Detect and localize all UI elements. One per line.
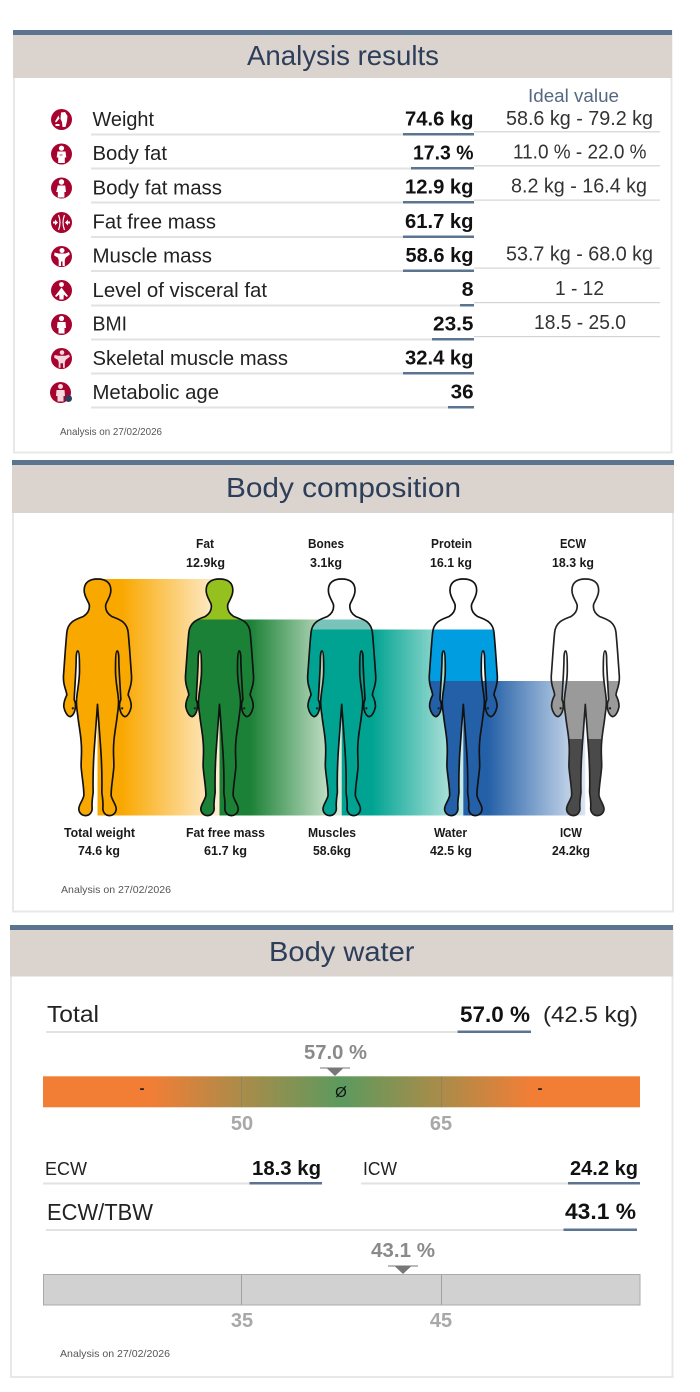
row: icw: [361, 1158, 640, 1184]
row: level of visceral fat: [51, 278, 660, 306]
row: skeletal muscle mass: Skeletal muscle mass: [92, 347, 288, 370]
label: ecw: 18.3 kg: [552, 556, 594, 570]
row: weight: 58.6 kg - 79.2 kg: [506, 108, 653, 130]
row: body fat mass: [51, 176, 660, 204]
label: water: [430, 826, 472, 858]
label: water: 42.5 kg: [430, 844, 472, 858]
figure: bones and muscles: [305, 577, 378, 829]
label: fat free mass: 61.7 kg: [204, 844, 247, 858]
gauge: total body water: Ø: [335, 1084, 347, 1101]
panel: analysis results: [13, 30, 672, 452]
icon: body fat mass: [51, 178, 72, 198]
row: ecw/tbw: ECW/TBW: [47, 1199, 153, 1225]
label: fat free mass: Fat free mass: [186, 826, 265, 840]
row: ecw/tbw: [46, 1199, 637, 1231]
label: icw: 24.2kg: [552, 844, 590, 858]
row: weight: Weight: [92, 108, 154, 131]
analysis date: Analysis on 27/02/2026: [60, 426, 162, 438]
row: metabolic age: 36: [451, 380, 474, 404]
label: total weight: Total weight: [64, 826, 136, 840]
row: total water: (42.5 kg): [543, 1002, 638, 1027]
label: protein: Protein: [431, 537, 472, 551]
gauge: total body water: -: [538, 1080, 542, 1097]
gauge: total body water: 50: [231, 1113, 253, 1135]
label: bones: 3.1kg: [310, 556, 342, 570]
gauge: ecw/tbw: [44, 1274, 640, 1332]
row: body fat mass: 8.2 kg - 16.4 kg: [511, 176, 647, 198]
row: skeletal muscle mass: [51, 346, 474, 374]
label: muscles: 58.6kg: [313, 844, 351, 858]
row: bmi: 23.5: [433, 312, 474, 336]
gauge: ecw/tbw: 35: [231, 1310, 253, 1332]
label: total weight: [64, 826, 136, 858]
row: total water: Total: [47, 1001, 99, 1027]
row: body fat mass: Body fat mass: [92, 176, 222, 200]
row: ecw/tbw: 43.1 %: [565, 1199, 636, 1224]
label: bones: Bones: [308, 537, 344, 551]
row: body fat: Body fat: [92, 142, 167, 165]
gradient band: muscles to water: [342, 630, 463, 816]
figure: protein and water: [427, 577, 500, 831]
label: fat: 12.9kg: [186, 556, 225, 570]
label: icw: ICW: [560, 826, 582, 840]
row: weight: [51, 108, 660, 136]
row: body fat: 17.3 %: [413, 142, 474, 164]
heading: body composition: Body composition: [226, 472, 461, 503]
row: level of visceral fat: Level of visceral fat: [92, 279, 267, 302]
analysis date: Analysis on 27/02/2026: [61, 884, 171, 896]
icon: visceral fat: [51, 280, 72, 301]
gradient band: total weight to fat free mass: [98, 579, 220, 816]
label: protein: [430, 537, 472, 570]
column heading: ideal value: Ideal value: [528, 85, 619, 106]
icon: metabolic age: [50, 382, 72, 403]
marker: 43.1 percent: [371, 1240, 435, 1274]
gauge: ecw/tbw: 45: [430, 1310, 452, 1332]
icon: fat free mass: [51, 212, 72, 233]
label: protein: 16.1 kg: [430, 556, 472, 570]
heading: analysis results: Analysis results: [247, 40, 439, 71]
row: muscle mass: 58.6 kg: [406, 244, 474, 267]
row: body fat: [51, 142, 660, 170]
figure: fat and fat free mass: [183, 577, 256, 819]
panel: body water: [10, 925, 673, 1377]
label: muscles: [308, 826, 356, 858]
icon: muscle mass: [51, 246, 72, 267]
row: ecw: [43, 1158, 322, 1184]
gradient band: water to icw: [463, 681, 585, 816]
marker: 43.1 percent: 43.1 %: [371, 1240, 435, 1262]
label: ecw: ECW: [560, 537, 586, 551]
heading: body water: Body water: [269, 936, 414, 967]
row: bmi: 18.5 - 25.0: [534, 312, 626, 334]
row: bmi: [51, 312, 660, 340]
row: weight: 74.6 kg: [405, 108, 474, 130]
row: metabolic age: Metabolic age: [92, 381, 219, 404]
label: ecw: [552, 537, 594, 570]
row: fat free mass: [51, 210, 474, 238]
row: muscle mass: Muscle mass: [92, 245, 212, 268]
icon: bmi: [51, 314, 72, 335]
row: total water: 57.0 %: [460, 1002, 530, 1027]
row: skeletal muscle mass: 32.4 kg: [405, 346, 474, 370]
row: bmi: BMI: [92, 313, 127, 336]
gradient band: fat free mass to muscles: [220, 620, 342, 816]
panel: body composition: [12, 460, 674, 912]
marker: 57.0 percent: [304, 1042, 367, 1076]
label: fat: [186, 537, 225, 570]
icon: skeletal muscle mass: [51, 348, 72, 369]
label: bones: [308, 537, 344, 570]
marker: 57.0 percent: 57.0 %: [304, 1042, 367, 1064]
row: total water: [46, 1001, 638, 1033]
figure: total weight: [63, 579, 132, 816]
icon: weight: [51, 109, 72, 130]
gauge: total body water: 65: [430, 1113, 452, 1135]
figure: ecw and icw: [549, 577, 622, 826]
label: fat: Fat: [196, 537, 215, 551]
label: water: Water: [434, 826, 467, 840]
row: metabolic age: [50, 380, 474, 408]
row: muscle mass: 53.7 kg - 68.0 kg: [506, 244, 653, 266]
row: fat free mass: Fat free mass: [92, 210, 216, 234]
label: icw: [552, 826, 590, 858]
label: total weight: 74.6 kg: [78, 844, 120, 858]
row: body fat: 11.0 % - 22.0 %: [513, 142, 647, 164]
row: body fat mass: 12.9 kg: [405, 176, 474, 198]
analysis date: Analysis on 27/02/2026: [60, 1348, 170, 1360]
label: fat free mass: [186, 826, 265, 858]
row: muscle mass: [51, 244, 660, 272]
row: icw: ICW: [363, 1158, 398, 1179]
row: ecw: ECW: [45, 1158, 88, 1179]
row: fat free mass: 61.7 kg: [405, 210, 474, 233]
row: icw: 24.2 kg: [570, 1158, 638, 1180]
label: muscles: Muscles: [308, 826, 356, 840]
icon: body fat: [51, 144, 72, 164]
row: level of visceral fat: 8: [462, 278, 474, 301]
gauge: total body water: -: [140, 1080, 144, 1097]
row: level of visceral fat: 1 - 12: [555, 278, 604, 300]
gauge: total body water: [43, 1076, 640, 1135]
row: ecw: 18.3 kg: [252, 1158, 321, 1180]
